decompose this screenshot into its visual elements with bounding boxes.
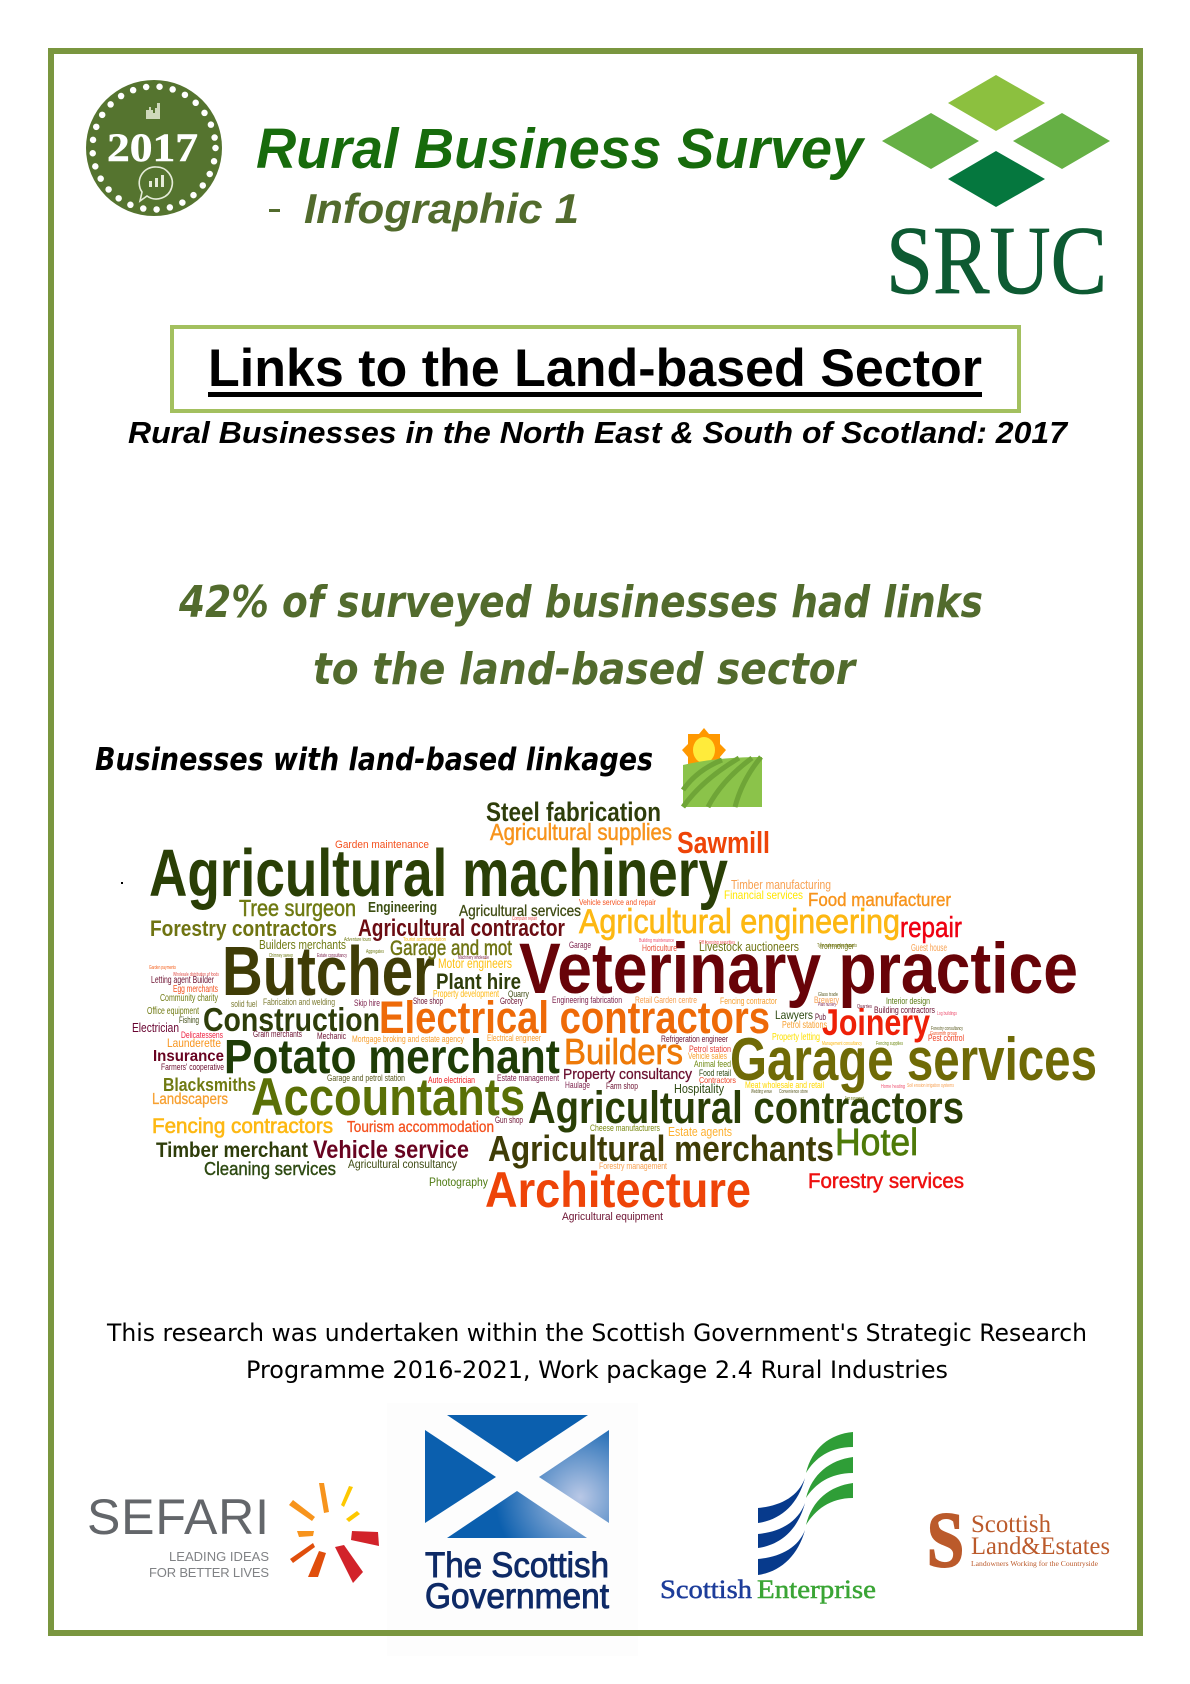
word cloud: Veterinary practice — [519, 930, 1078, 1009]
word cloud: Estate agents — [668, 1124, 732, 1139]
word cloud: Community charity — [160, 993, 218, 1004]
logo: SRUC — [882, 75, 1110, 314]
word cloud: Estate consultancy — [317, 953, 347, 959]
word cloud: Property development — [433, 989, 499, 1000]
logo: Scottish Land & Estates: S — [927, 1496, 964, 1583]
word cloud: Timber merchant — [156, 1139, 308, 1162]
word cloud: Egg merchants — [173, 984, 218, 995]
word cloud: Soil erosion irrigation systems — [907, 1083, 954, 1089]
logo: SEFARI: FOR BETTER LIVES — [149, 1565, 269, 1580]
word cloud: Garage services — [730, 1026, 1097, 1093]
word cloud: Tourist accommodation — [403, 937, 446, 943]
word cloud: Machinery wholesale — [458, 955, 489, 961]
logo: Scottish Land & Estates — [927, 1496, 1110, 1583]
logo: Scottish Land & Estates: Landowners Working for the Countryside — [971, 1559, 1099, 1568]
word cloud: Estate management — [497, 1073, 559, 1083]
logo: SEFARI: LEADING IDEAS — [169, 1549, 269, 1564]
logo: Scottish Enterprise — [660, 1432, 876, 1604]
word cloud: solid fuel — [231, 999, 257, 1009]
key statistic: 42% of businesses: to the land-based sector — [313, 644, 857, 695]
logo: Scottish Land & Estates: Land&Estates — [971, 1533, 1110, 1560]
word cloud: Builders — [564, 1031, 683, 1072]
word cloud: Garage — [569, 940, 591, 950]
word cloud: Forestry consultancy — [931, 1026, 963, 1032]
word cloud: Cheese manufacturers — [590, 1123, 660, 1133]
research statement: Programme 2016-2021, Work package 2.4 Rural Industries — [246, 1356, 948, 1384]
word cloud: Meat wholesale and retail — [745, 1080, 824, 1090]
word cloud: Agricultural contractors — [528, 1082, 964, 1133]
icon: sun over field — [682, 728, 762, 807]
stray dot — [121, 882, 123, 884]
word cloud: Office equipment — [147, 1006, 199, 1017]
word cloud: Mechanic — [317, 1031, 346, 1041]
faint image background behind Scottish Government logo — [387, 1403, 638, 1656]
word cloud: Forestry contractors — [150, 916, 337, 941]
word cloud: Joinery — [822, 1002, 930, 1043]
key statistic: 42% of businesses: 42% of surveyed businesses had links — [178, 577, 983, 628]
word cloud: Garage and petrol station — [327, 1073, 405, 1083]
word cloud: Ironmonger — [820, 941, 854, 951]
word cloud: Computer repair — [512, 916, 537, 922]
word cloud: Off licensing securities — [699, 940, 735, 946]
key statistic: 42% of businesses — [178, 577, 983, 695]
word cloud: Blacksmiths — [163, 1075, 256, 1095]
title: Rural Business Survey: Rural Business Survey — [256, 117, 866, 181]
word cloud: Electrical engineer — [487, 1033, 541, 1043]
word cloud: Timber manufacturing — [731, 877, 831, 892]
word cloud: Chimney sweep — [269, 953, 293, 959]
word cloud: Tree surgeon — [239, 895, 356, 921]
word cloud: Launderette — [167, 1036, 221, 1050]
word cloud: Electrical contractors — [379, 992, 770, 1043]
word cloud: Food manufacturer — [808, 890, 951, 910]
word cloud: Fencing contractor — [720, 996, 777, 1006]
logo: The Scottish Government: The Scottish — [425, 1546, 609, 1585]
research statement: This research was undertaken within the Scottish Government's Strategic Research — [106, 1319, 1087, 1347]
word cloud: Log buildings — [937, 1011, 957, 1017]
word cloud: Skip hire — [354, 998, 380, 1008]
word cloud: Cleaning services — [204, 1159, 336, 1179]
word cloud: Aggregates — [366, 949, 384, 955]
word cloud: Builders merchants — [259, 937, 346, 952]
word cloud: Forestry services — [808, 1170, 964, 1193]
word cloud: Plant hire — [436, 969, 521, 994]
word cloud: Vehicle service and repair — [579, 897, 656, 907]
word cloud: Agricultural supplies — [490, 819, 672, 845]
word cloud: Fencing supplies — [876, 1041, 903, 1047]
word cloud: Landscapers — [152, 1091, 228, 1108]
word cloud: Fabrication and welding — [263, 997, 335, 1007]
badge: 2017 survey: 2017 — [107, 125, 198, 170]
logo: Scottish Land & Estates: Scottish — [971, 1511, 1051, 1538]
word cloud: Agricultural engineering — [579, 903, 900, 941]
word cloud: Management consultancy — [822, 1041, 862, 1047]
logo: Scottish Enterprise: Enterprise — [757, 1575, 876, 1604]
word cloud: Farm management — [845, 1096, 864, 1102]
word cloud: Vehicle sales — [688, 1051, 727, 1061]
word cloud: Agricultural machinery — [149, 836, 728, 911]
word cloud: Letting agent Builder — [151, 975, 214, 986]
word cloud: Quarry — [508, 989, 529, 999]
word cloud: Pest control — [928, 1033, 964, 1043]
word cloud: Electrician — [132, 1020, 179, 1035]
word cloud: Financial services — [724, 888, 803, 902]
word cloud: repair — [900, 912, 962, 944]
word cloud: Farm shop — [606, 1081, 638, 1091]
word cloud: Interior design — [886, 996, 930, 1006]
word cloud: Garage and mot — [390, 937, 512, 960]
subtitle: Infographic 1: Infographic 1 — [304, 185, 579, 232]
word cloud: Tyre sales and exhausts — [817, 943, 857, 949]
word cloud: Steel fabrication — [486, 797, 661, 827]
word cloud: Property letting — [772, 1032, 820, 1043]
word cloud: Construction — [203, 1001, 380, 1038]
section heading: Businesses with land-based linkages: Businesses with land-based linkages — [95, 742, 653, 778]
word cloud: Agricultural services — [459, 903, 581, 920]
word cloud: Garden payments — [149, 965, 176, 971]
word cloud: Engineering fabrication — [552, 995, 622, 1005]
word cloud: Gunsmith group — [930, 1031, 957, 1037]
word cloud: Forestry management — [599, 1161, 667, 1171]
word cloud: Convenience store — [779, 1089, 808, 1095]
word cloud: Wedding venue — [751, 1089, 772, 1095]
word cloud: Contractors — [699, 1075, 736, 1085]
word cloud: Agricultural equipment — [562, 1211, 663, 1223]
word cloud: Property consultancy — [563, 1066, 692, 1083]
word cloud: Motor engineers — [438, 955, 512, 971]
word cloud: Building maintenance — [639, 938, 674, 944]
word cloud: Petrol station — [689, 1044, 731, 1054]
word cloud: Agricultural merchants — [488, 1128, 834, 1169]
word cloud: Home heating — [881, 1084, 905, 1090]
word cloud: Sawmill — [677, 825, 770, 860]
word cloud: Haulage — [565, 1080, 590, 1090]
word cloud: Quarries — [857, 1004, 872, 1010]
heading box: Links to the Land-based Sector: Links to the Land-based Sector — [208, 339, 982, 398]
word cloud: Brewery — [814, 995, 839, 1005]
word cloud: Farmers' cooperative — [161, 1062, 224, 1073]
word cloud: Tourism accommodation — [347, 1119, 494, 1136]
word cloud: Petrol stations — [782, 1020, 827, 1031]
word cloud: Horticulture — [642, 943, 677, 954]
word cloud: Delicatessens — [181, 1030, 223, 1041]
word cloud: Shoe shop — [413, 996, 443, 1006]
word cloud: Photography — [429, 1175, 488, 1189]
word cloud: Mortgage broking and estate agency — [352, 1034, 464, 1044]
word cloud: Gun shop — [495, 1115, 523, 1125]
word cloud: Fencing contractors — [152, 1115, 333, 1138]
word cloud: Food retail — [699, 1068, 731, 1078]
word cloud: Accountants — [251, 1068, 525, 1127]
word cloud: Potato merchant — [224, 1031, 560, 1084]
logo: SEFARI — [87, 1483, 379, 1583]
word cloud: Auto electrician — [428, 1075, 475, 1086]
word cloud: Pub — [815, 1012, 826, 1022]
word cloud: Hospitality — [674, 1081, 724, 1096]
word cloud: Fishing — [179, 1015, 199, 1025]
logo: The Scottish Government: Government — [425, 1577, 609, 1616]
word cloud: Hotel — [835, 1122, 918, 1164]
word cloud: Insurance — [153, 1048, 224, 1065]
subheading: region and year: Rural Businesses in the North East & South of Scotland: 2017 — [128, 415, 1069, 450]
word cloud: Grain merchants — [253, 1029, 302, 1039]
word cloud: Building contractors — [874, 1005, 935, 1015]
word cloud: Plant nursery — [818, 1002, 836, 1008]
word cloud: Engineering — [368, 899, 437, 916]
logo: SRUC: SRUC — [886, 207, 1107, 314]
badge: 2017 survey — [86, 80, 222, 216]
word cloud: Retail Garden centre — [635, 995, 697, 1005]
word cloud: Architecture — [485, 1162, 751, 1218]
word cloud: Butcher — [222, 932, 435, 1010]
word cloud: Guest house — [911, 943, 947, 954]
word cloud: Lawyers — [775, 1008, 813, 1022]
word cloud: Grocery — [500, 996, 523, 1006]
logo: The Scottish Government — [425, 1415, 609, 1616]
word cloud: Refrigeration engineer — [661, 1034, 728, 1045]
word cloud: Wholesale distribution of foods — [173, 972, 219, 978]
heading box: Links to the Land-based Sector — [172, 327, 1019, 411]
logo: SEFARI: SEFARI — [87, 1489, 269, 1545]
word cloud: Agricultural contractor — [358, 915, 565, 942]
logo: Scottish Enterprise: Scottish — [660, 1575, 752, 1604]
word cloud: Garden maintenance — [335, 839, 429, 851]
word cloud: Glass trade — [818, 992, 838, 998]
word cloud: Adventure tours — [344, 937, 371, 943]
research statement — [106, 1319, 1087, 1384]
word cloud: Agricultural consultancy — [348, 1157, 457, 1171]
word cloud: Animal feed — [694, 1059, 731, 1069]
word cloud — [132, 797, 1097, 1223]
word cloud: Vehicle service — [313, 1136, 469, 1164]
word cloud: Livestock auctioneers — [699, 939, 799, 954]
